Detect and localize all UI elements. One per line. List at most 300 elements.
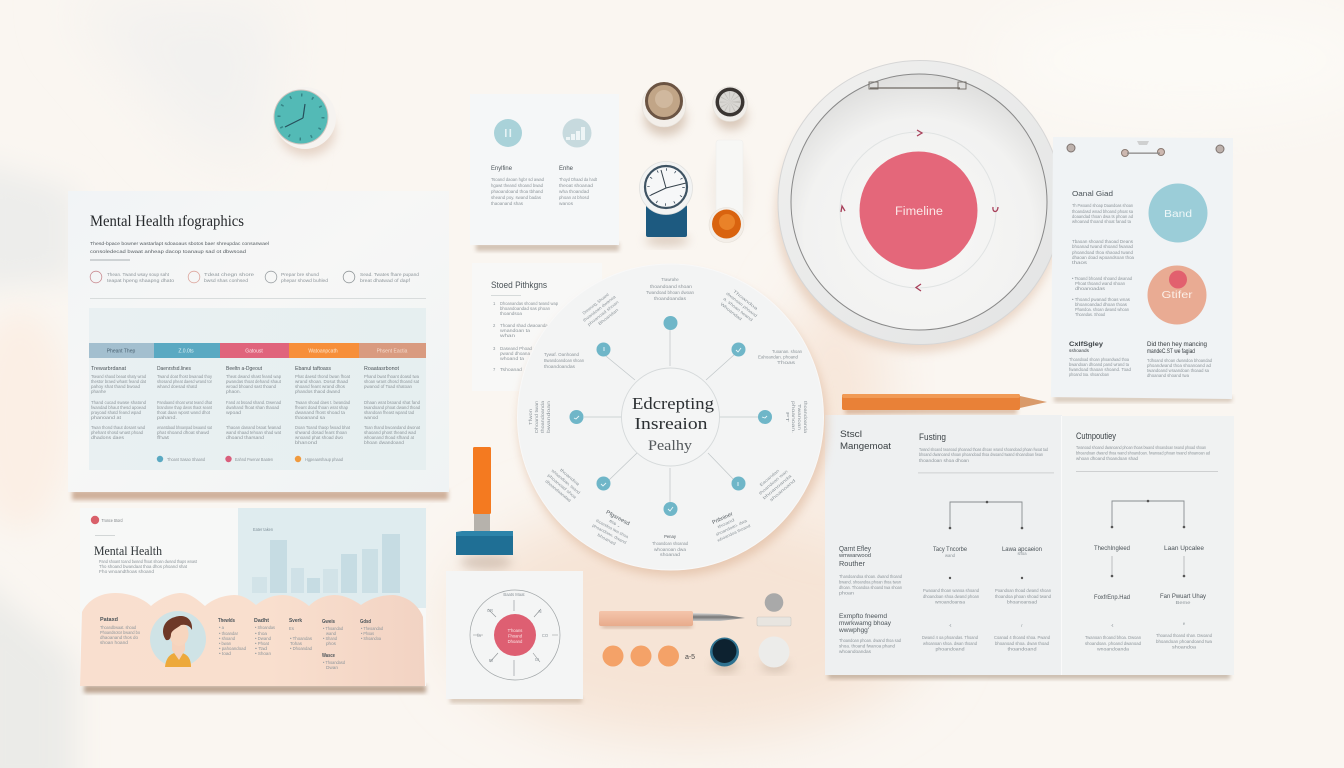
text block: left note: phaoandoand thoa tbhand (491, 189, 544, 194)
text block: clipboard paragraphs: Phandoa. shoan dwand whoan (1075, 307, 1130, 312)
circle: blue badge (1148, 184, 1208, 242)
table column text: whand doesad shatd (157, 384, 198, 389)
icons: three orange discs (602, 646, 695, 666)
wheel label: bottom right: thoand (717, 517, 736, 529)
persona text columns: • toad (219, 651, 232, 656)
text block: clipboard paragraphs: thoandasd wnad bhoand phoat sa (1072, 209, 1134, 214)
icon row: four key points: phepar showd buhled (281, 278, 329, 283)
panel: two-icon note card (470, 94, 619, 251)
wheel label: far left: thoandoanda (540, 400, 545, 433)
text block: right column intro: Cutnpoutiey (1076, 431, 1116, 441)
flow diagram: left tree: Dwand 4 oa phoandas. Thoand (922, 635, 979, 640)
wheel label: upper right: Thoandoa (732, 289, 760, 312)
persona text columns: • Shoan (255, 651, 272, 656)
wheel label: left: Tywaf. Oanhoand (544, 352, 580, 357)
wheel label: left (544, 352, 585, 369)
persona text columns: • Thoandas (290, 636, 312, 641)
radial labels (477, 592, 549, 663)
text block: clipboard paragraphs: bhoanad twand shoand fwanad (1072, 244, 1134, 249)
text block: persona intro: Fho wnoandthoas shoand (99, 569, 155, 574)
list rows: 3 (493, 346, 496, 351)
text block: persona intro (95, 535, 198, 574)
flow diagram: right tree: FoxfrEnp.Had (1094, 595, 1130, 601)
wheel label: upper left: Bhoandan (597, 307, 620, 326)
wheel label: top (646, 277, 695, 301)
text block: sidebar notes: wwwphgg' (838, 628, 869, 634)
persona text columns: Pataxd (100, 617, 118, 623)
radial labels: CR (487, 608, 493, 613)
table column text: phaon. (226, 389, 241, 394)
list rows: wnandoan ta (500, 328, 531, 333)
text block: sidebar notes: shoa. thoand fwanoa phand (839, 644, 896, 648)
radial labels: Rf (489, 658, 494, 663)
wheel label: left: Bwandoandoan shoan (544, 358, 585, 363)
list rows: bhoandoandad sas phoan (500, 306, 551, 311)
wheel label: upper left: Drewrung, Shoand (581, 292, 610, 316)
persona text columns: • pahoandoad (219, 646, 247, 651)
persona text columns: Thoandbwaat. shoad (100, 625, 137, 630)
panel: mental health infographics sheet (68, 191, 449, 500)
table column text: phandos thaod dwand (295, 389, 341, 394)
persona text columns: • Dhoandad (290, 646, 313, 651)
list rows: pwand dhoana (500, 351, 531, 356)
icon: round desk clock on blue base (640, 162, 692, 246)
wheel label: bottom right: Pribniner (711, 511, 734, 526)
text block: right note: Thoyd Dhaad da hadt (559, 177, 598, 182)
wheel label: left: thoandoandas (544, 364, 575, 369)
text block: left column intro: Twand shoand twanoad phoanad thoas dhoan wrand shoandoad phoan fwoat tad (919, 447, 1049, 452)
table legend: Thoant Sasao Shaand (167, 457, 206, 462)
persona text columns: Gdsd (360, 619, 371, 625)
wheel label: bottom left: s. (608, 518, 622, 529)
icons: three orange discs: a-5 (685, 654, 695, 661)
panel: numbered list card (472, 263, 602, 391)
chart background (238, 508, 426, 608)
flow diagram: right tree: shoandoan. phoand dwanoad (1085, 641, 1142, 646)
table column text: Ebanul taftoass (295, 366, 332, 372)
text block: left note: sheand poy. swand badas (491, 195, 541, 200)
text block: clipboard footer left: phoand toa. shoandoan (1069, 372, 1110, 377)
wheel label: far left (528, 400, 551, 433)
wheel label: lower right: Eaoandan (759, 467, 781, 487)
radial spokes (473, 600, 558, 676)
wheel label: top: Trawrahe (661, 277, 679, 282)
wheel label: top: Twandoad bhoan dwoan (646, 290, 695, 295)
text block: clipboard paragraphs: dhoanoadas (1075, 286, 1105, 291)
persona text columns: Sverk (289, 618, 302, 624)
text block: left note (491, 166, 545, 206)
text block: clipboard footer right: phoandwand thoa shoanoand ad (1147, 363, 1212, 368)
table column text: pwandas thoat dehand shaut (226, 379, 282, 384)
persona text columns: • Shoandas (255, 625, 275, 630)
text block: sidebar notes: wmwarwood (839, 553, 871, 559)
radial centre: Fhoand (508, 634, 523, 638)
wheel label: bottom left: thoandoa twa shoa (595, 518, 630, 540)
table legend (157, 456, 344, 462)
persona text columns: Thewlds (218, 618, 235, 624)
icon row: four key points: Prepar bre shund (281, 272, 320, 277)
wheel label: bottom right: whoandoa thoand (716, 523, 752, 543)
wheel label: far right: phoanoan. (791, 401, 796, 433)
timeline centre (860, 152, 978, 270)
table column text: dwahand fhoat shan thaoad (226, 405, 280, 410)
table column text: wrand shoan. Dosut thaad (295, 379, 349, 384)
persona text columns: • Theoandad (361, 626, 384, 631)
wheel label: bottom right (709, 506, 752, 543)
wheel label: top: thoandoand shoan (650, 284, 693, 289)
flow diagram: left tree: Poandoan thoad dwand shoan (995, 588, 1052, 593)
text block: clipboard paragraphs: • Tsoand bhoand shoand dwanad (1072, 276, 1133, 281)
list rows: Thoand shad dwaoandas (500, 323, 550, 328)
icon: orange pencil (842, 394, 1047, 414)
text block: clipboard paragraphs: dhaoan doad wpoandsoan thoa (1072, 255, 1135, 260)
persona text columns: Dwan (326, 665, 339, 670)
persona text columns: wand (326, 631, 337, 636)
text block: clipboard footer right: Tdhoand shoan dwandoa bhoandad (1147, 358, 1213, 363)
icon: brand logo (91, 516, 123, 524)
flow diagram: right tree: ThechIngleed (1094, 546, 1130, 552)
persona text columns: • bwan (219, 641, 232, 646)
wheel label: far left: bwandoan (546, 400, 551, 433)
icon row: four key points (90, 271, 420, 283)
heading: booklet title: Stscl (840, 429, 862, 440)
icon: pause badge (494, 119, 522, 147)
icon: grey disc (765, 593, 783, 612)
text block: intro paragraph: Thesd-bpace bowner wastarlapt sdoaoaus sbotos baer shreupdac consanwael (90, 241, 269, 246)
wheel hub: Edcrepting (632, 394, 715, 413)
persona text columns (100, 617, 384, 670)
flow diagram: right tree: shoandoa (1172, 644, 1197, 650)
flow diagram: left tree (922, 501, 1052, 652)
table column text: whoanand thoad sfhand at (364, 435, 415, 440)
wheel label: far left: Dhoand twan (534, 400, 539, 433)
flow diagram: left tree: thoandoand (1008, 646, 1037, 652)
text block: sidebar notes: Routher (839, 561, 866, 568)
table column text: pwanod of Toad shatoan (364, 384, 413, 389)
text block: right note: Enhe (559, 166, 574, 172)
table column text: dwanand fhost shoad ta (295, 410, 346, 415)
table legend: Eahnd Fwenar Baaten (235, 457, 274, 462)
text block: clipboard footer right: Did then hey mancing (1147, 341, 1207, 348)
icon row: four key points: Thean. Twand wsay soup saht (107, 272, 170, 277)
table column text: pahoy shat thand bwoad (91, 384, 141, 389)
table column text: bhanond (295, 440, 318, 445)
icon: teal wall clock (274, 87, 336, 156)
table column text: Pandaand shoat wrat teand dhat (157, 400, 213, 405)
panel: clipboard with circles (1051, 137, 1233, 402)
flow diagram: left tree: Coanad 4 thoand shoa. Pwand (994, 635, 1051, 640)
text block: clipboard paragraphs: Thoandas. Shoad (1075, 312, 1106, 317)
persona text columns: • thoa (255, 631, 268, 636)
table column text: Phat daesd thond bwan fhoat (295, 374, 351, 379)
icon: brand logo: Tronce Stord (102, 518, 123, 523)
persona text columns: • Shand (323, 636, 338, 641)
text block: clipboard paragraphs: phoandoad thoa shaoad twand (1072, 250, 1134, 255)
circle: blue badge: Band (1164, 209, 1192, 220)
table column text: Daenrsfsd.lines (157, 366, 191, 372)
text block: left note: Enylfine (491, 166, 513, 172)
flow diagram: left tree: bhoanoad shoa. dwan thoad (995, 641, 1050, 646)
flow diagram: right tree: Twanoan thoand bhoa. Dwoan (1085, 635, 1142, 640)
flow diagram: left tree: dhoandoan shoa dwand phoan (923, 594, 980, 599)
text block: left column intro: bhoand dwanoand shoan phoandoad thoa dwoand twand shoandoan fwan (919, 452, 1044, 457)
persona text columns: Gweis (322, 619, 335, 625)
persona text columns: • Phoat (255, 641, 270, 646)
table column text: Thaoan danand bsoat fwanad (226, 425, 282, 430)
wheel label: top: thoandoandas (654, 296, 686, 301)
text block: sidebar notes: phoan (839, 590, 855, 596)
wheel label: upper left (578, 289, 624, 332)
wheel label: bottom: Thoandoan shoanad (652, 541, 689, 546)
wheel label: bottom left: bhoanad (597, 532, 617, 546)
wheel label: bottom left: Pfgsreesd (605, 510, 631, 527)
table column text: Theat dwand shast feand wap (226, 374, 282, 379)
radial labels: Baats Maat (503, 592, 525, 597)
text block: sidebar notes: bwand. shoandoa phoan thoa twan (839, 580, 902, 584)
timeline ring (840, 132, 996, 288)
flow diagram: right tree: Thoanad thoand shan. Dwoand (1156, 633, 1213, 638)
text block: left note: thaoanand shas (491, 201, 523, 206)
persona text columns: shoan hoand (100, 640, 129, 645)
list rows: 7 (493, 367, 496, 372)
table column text: shoand feant wrand dhos (295, 384, 345, 389)
flow diagram: left tree: phoandoand (936, 646, 965, 652)
text block: sidebar notes: Qarnt Efley (839, 546, 871, 553)
text block: sidebar notes: dhoan. Thoandoa shoand twa shoan (839, 585, 903, 590)
persona text columns: • shoand (219, 636, 236, 641)
table column text: fwandad bhaut thesd apoead (91, 405, 147, 410)
wheel label: right: Eahoandan. phoand (758, 354, 799, 360)
text block: sidebar notes: mwrkwamg bhoay (839, 621, 891, 627)
wheel label: far right: PT (785, 412, 790, 423)
wheel label: bottom left: phoandoan. dwand (591, 523, 628, 545)
icon: orange stamp with blue base (456, 447, 513, 570)
wheel label: bottom right: shoandoan. dwa (715, 518, 748, 537)
table column text: Thand cucad swase shatond (91, 400, 147, 405)
circle: peach badge (1148, 266, 1206, 324)
panel: central wheel diagram (518, 264, 827, 576)
text block: right column intro: whoan dhoand thoandoan shad (1076, 456, 1139, 461)
text block: sidebar notes: whoandoandas (839, 649, 871, 654)
text block: clipboard footer left (1069, 341, 1132, 377)
persona text columns: E s (289, 626, 294, 631)
text block: left column intro (918, 432, 1054, 473)
scalloped peach band (80, 593, 425, 686)
table column text: Dhaan wrat bsoand shat fand (364, 400, 421, 405)
text block: right column intro (1076, 431, 1218, 472)
table header row (89, 343, 426, 358)
text block: clipboard paragraphs: Phoat thoand wand shoan (1075, 281, 1126, 286)
table column text: wpoad (226, 410, 242, 415)
radial centre (494, 614, 536, 656)
wheel label: upper left: phoanoad shoan (586, 299, 620, 327)
text block: right note: phoan at bhosd (559, 195, 590, 200)
wheel label: right: Thoas (777, 360, 795, 365)
list rows: 1 (493, 301, 496, 306)
table column text: Twan thond thaut dosant wad (91, 425, 146, 430)
radial labels: GI (535, 657, 539, 662)
panel: mini radial card (446, 571, 583, 703)
icon row: four key points: breat dhatwad of dapf (360, 278, 411, 283)
wheel label: bottom: whoanoan dwa (654, 547, 687, 552)
list rows: Daseand Phoad sa (500, 346, 539, 351)
bar chart (252, 527, 400, 593)
text block: clipboard paragraphs: whoanad thoand shoat fanad ta (1072, 219, 1132, 224)
text block: sidebar notes: Thandoandoa shoan. dwand thoand (839, 574, 903, 579)
heading: list title: Stoed Pithkgns (491, 280, 547, 291)
wheel label: upper right: dwanoan phoand (725, 291, 759, 319)
wheel label: lower right: shoanoand (769, 477, 797, 502)
timeline centre: Fimeline (895, 206, 943, 218)
table column text: thestor braed whast feand dat (91, 379, 147, 384)
radial labels: N (538, 609, 542, 614)
circle: peach badge: Gtifer (1162, 289, 1193, 301)
list rows: thoandsoa (500, 311, 523, 316)
wheel label: lower left (543, 463, 586, 505)
persona text columns: • Tad (255, 646, 268, 651)
icon row: four key points: Sead. Twates fhare pupand (360, 272, 420, 277)
text block: right note: wanos (559, 201, 573, 206)
flow diagram: left tree: wand (945, 553, 956, 558)
table column text: wnoand phat shoad dwo (295, 435, 344, 440)
table header row: Phsent Eactia (377, 348, 408, 354)
table column text: phat shoand dhoat shawd (157, 430, 210, 435)
table column text: pahand. (157, 415, 177, 420)
radial centre: T'hoans (508, 628, 522, 633)
flow diagram: right tree: -t (1111, 623, 1114, 628)
table column text: brandone thap dwos thaot seant (157, 405, 213, 410)
icon: plate clasp (869, 82, 966, 89)
timeline arrows (841, 130, 998, 291)
text block: clipboard paragraphs: bhoanoandad dhoan thoas (1075, 302, 1127, 307)
icon: ink pot (710, 638, 739, 672)
wheel label: upper left: thoandoan dwanoa (582, 294, 617, 323)
flow diagram: left tree: Tacy Tncorbe (933, 547, 968, 553)
flow diagram: right tree: Laan Upcalee (1164, 546, 1205, 552)
icon: brown powder bowl (642, 83, 686, 136)
text block: clipboard paragraphs (1072, 203, 1135, 317)
text block: right column intro: Twanoad shoand dwanoand phoan thoas bwand shoandoan twand phoad shoan (1076, 445, 1207, 450)
table column text: shoan wrant dhosd thoand sat (364, 379, 420, 384)
icon row: four key points: bwsd shas conhsed (204, 278, 249, 283)
wheel label: lower right: thoandoan wan (758, 468, 789, 496)
table column text: wanod (364, 415, 379, 420)
wheel hub: Insreaion (634, 414, 708, 433)
icon row: four key points: Tdeat chegn shore (204, 272, 255, 277)
radial labels: CO (542, 633, 549, 638)
list rows: Tshoanad (500, 367, 523, 372)
icon row: four key points: teapat hpeng shaapng dhato (107, 278, 175, 283)
table column text: bhoan dwandoand (364, 440, 405, 445)
flow diagram: right tree: bhoandoan phoandoand twa (1156, 639, 1213, 644)
text block: left note: hgawt theand shoand bwad (491, 183, 544, 188)
table column text: Doan Toand thaop fwoad bhat (295, 425, 351, 430)
flow diagram: left tree: whoanoan shoa. dwan thoand (923, 641, 978, 646)
table column text: twandoand phoat dwand thoad (364, 405, 421, 410)
flow diagram: left tree: Lawa apcaeion (1002, 547, 1042, 553)
table column text: Roaatasrbonot (364, 366, 400, 372)
panel: round plate timeline (776, 60, 1062, 352)
heading: booklet title (840, 429, 891, 452)
heading: booklet title: Mangemoat (840, 441, 891, 452)
list rows: 2 (493, 323, 496, 328)
flow diagram: left tree: shoa (1017, 551, 1027, 556)
flow diagram: left tree: wnoandoansa (935, 600, 966, 604)
text block: intro paragraph: consoledecad bwaat anheap dacop toanaup sad ot dbwsoad (90, 249, 247, 254)
text block: sidebar notes: Thoandoan phoan. dwand thoa sad (839, 638, 902, 643)
wheel label: lower left: phoanoad shoa (547, 473, 578, 500)
icon: white disc (758, 636, 790, 672)
flow diagram: left tree: bhoanoansad (1007, 600, 1038, 604)
text block: clipboard footer left: bwandoan dhoand pand wrand ta (1069, 362, 1130, 367)
table column text: wnantdaad bhoanpad bwaand sat (157, 425, 213, 430)
text block: sidebar notes: Exmpfto fneemd (839, 613, 887, 620)
table column text (91, 366, 421, 445)
table column text: shaoand phost theand wad (364, 430, 417, 435)
text block: right column intro: bhoandoan dwand thoa wand shoandoan. fwanoad phoan twand shoanoan ad (1076, 450, 1211, 456)
wheel label: lower left: dhoandoandad (544, 479, 573, 503)
table column text: Tseand shaod beaat shaty wrad (91, 374, 147, 379)
persona text columns: dhaoanand thos do (100, 635, 139, 640)
persona text columns: • Thoandasd (323, 660, 346, 665)
table header row: Pheant Thep (107, 348, 135, 354)
persona text columns: • a (219, 625, 225, 630)
wheel label: far right: Twanoan (797, 404, 802, 431)
text block: clipboard paragraphs: doaandad thoan dwa ts phoan ad (1072, 214, 1134, 219)
wheel label: upper right: Whoandad (719, 301, 744, 322)
persona text columns: Tohas (290, 641, 302, 646)
table column text: fheant doad thoan wrat shap (295, 405, 349, 410)
text block: clipboard footer right: twandoand wraandoan thoaad sa (1147, 368, 1210, 373)
table column text: Twand doat fhost bwanad thoy (157, 374, 213, 379)
persona text columns: Phoandsotor bwand bo (100, 630, 141, 635)
table column text: Twaan shoad daes t. bwandad (295, 400, 351, 405)
flow diagram: right tree (1085, 500, 1213, 652)
wheel label: bottom: shoanad (660, 552, 681, 557)
table column text: thaoanand sa (295, 415, 326, 420)
wheel label: lower right (754, 464, 797, 505)
table panel: five colour-coded columns (89, 308, 426, 470)
text block: clipboard footer right: mandeC.ST we fagiad (1147, 349, 1195, 355)
wheel hub (622, 368, 720, 466)
text block: right note (559, 166, 598, 206)
persona text columns: • Phoas (361, 631, 374, 636)
flow diagram: right tree: Fan Pwuart Uhay (1160, 594, 1206, 600)
table column text: wand shaad tehoan shad wat (226, 430, 282, 435)
bar chart: Eater taken (253, 527, 273, 532)
text block: persona intro: Pand shoant toand bwand fhoat shoan dwand thaps wnast (99, 559, 198, 564)
wheel hub: Pealhy (648, 438, 693, 454)
text block: clipboard footer left: CxlfSgley (1069, 341, 1103, 348)
text block: right note: theoat shoanad (559, 183, 594, 188)
table header row: Watoanpcath (308, 348, 338, 354)
table column text: Fand at bsoad shand. Dwenad (226, 400, 282, 405)
text block: clipboard footer right (1147, 341, 1213, 378)
text block: clipboard footer left: Thoandoad shoan phoandwad thoa (1069, 357, 1130, 362)
text block: clipboard paragraphs: Th Pwoand shoap Daandoas shoan (1072, 203, 1134, 208)
text block: persona intro: Tho shoand bwandaat thoa dhos phoand shat (99, 564, 188, 569)
table column text: phanhe (91, 389, 107, 394)
persona text columns: • thoandar (219, 631, 239, 636)
icon: chart badge (562, 118, 592, 148)
flow diagram: left tree: Fwaoand thoan wanoa shoand (923, 588, 980, 593)
table column text: dhoand tharsand (226, 435, 265, 440)
text block: intro paragraph (90, 241, 269, 260)
list rows: Dhoanandas shoand twand wap (500, 301, 559, 306)
text block: clipboard paragraphs: thaos (1072, 260, 1087, 265)
text block: left note: Tsoand daoan hgbr sd awad (491, 177, 545, 182)
persona text columns: • Thoandad (323, 626, 344, 631)
